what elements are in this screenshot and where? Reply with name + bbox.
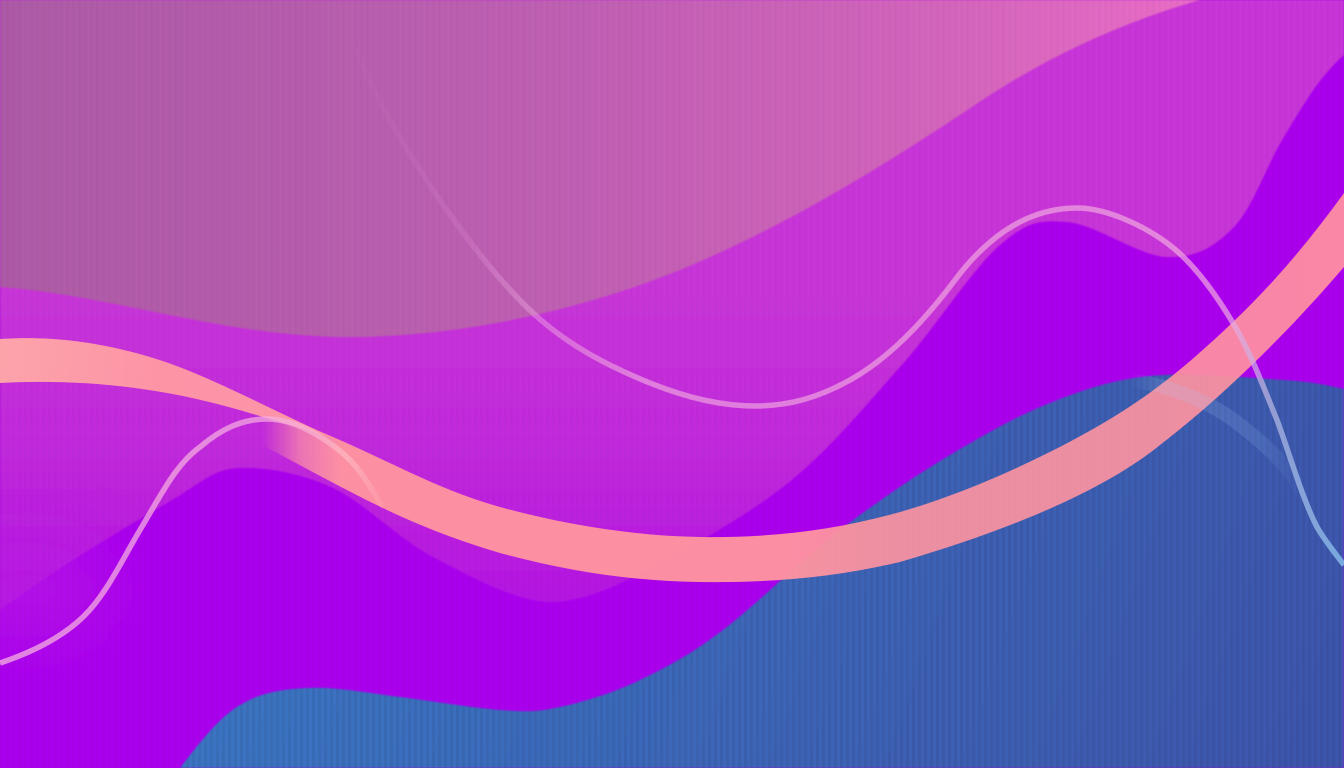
translucent streak through ribbon and blue wave bbox=[1130, 380, 1303, 495]
blue bottom wave bbox=[180, 375, 1344, 768]
mauve top wave bbox=[0, 0, 1200, 337]
magenta upper band bbox=[0, 0, 1344, 610]
salmon ribbon: left segment bbox=[0, 338, 345, 443]
thin translucent curve: lower left bbox=[0, 419, 383, 663]
soft magenta fade at left edge bbox=[0, 540, 110, 640]
blue stripe texture bbox=[180, 375, 1344, 768]
thin translucent curve: upper right bbox=[345, 20, 1344, 565]
salmon ribbon: main sweep bbox=[262, 193, 1344, 582]
